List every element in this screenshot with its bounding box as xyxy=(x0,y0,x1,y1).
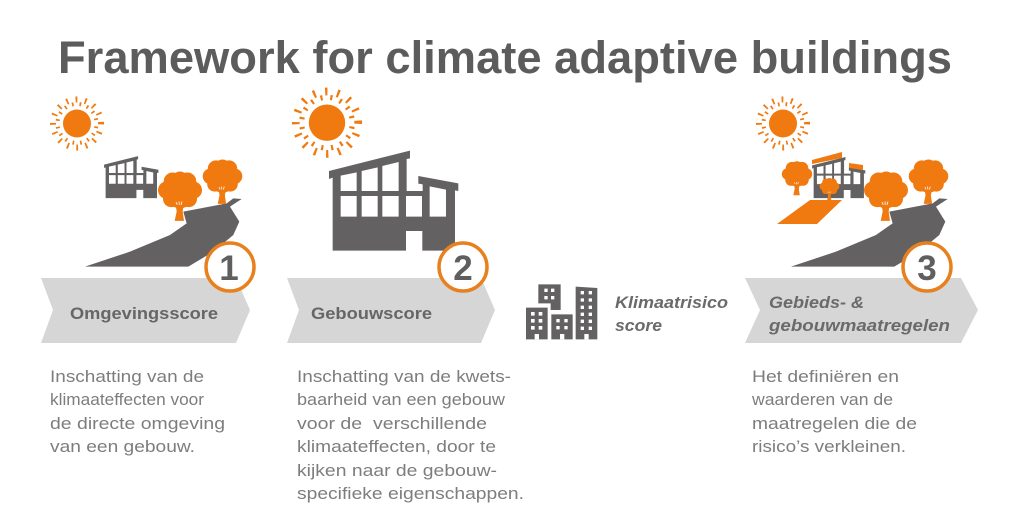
description 3: waarderen van de xyxy=(751,390,893,409)
label: omgevingsscore: Omgevingsscore xyxy=(70,304,218,323)
badge 2: 2 xyxy=(453,249,473,288)
description 1: van een gebouw. xyxy=(50,437,195,456)
badge 2 xyxy=(439,243,487,291)
description 1: de directe omgeving xyxy=(50,414,225,433)
description 1 xyxy=(50,367,225,456)
description 2: klimaateffecten, door te xyxy=(297,437,496,456)
badge 3 xyxy=(903,243,951,291)
description 2: baarheid van een gebouw xyxy=(297,390,506,409)
icon: tree large 1 xyxy=(158,172,202,221)
label: gebieds- en gebouwmaatregelen: gebouwmaatregelen xyxy=(768,316,950,335)
description 3: risico’s verkleinen. xyxy=(752,437,906,456)
description 1: klimaateffecten voor xyxy=(50,390,204,409)
icon: tree left 3 xyxy=(782,161,812,195)
description 3: maatregelen die de xyxy=(752,414,917,433)
badge 1 xyxy=(206,243,254,291)
description 3: Het definiëren en xyxy=(752,367,899,386)
panel: klimaatrisico score xyxy=(526,284,728,339)
description 1: Inschatting van de xyxy=(50,367,204,386)
icon: road 1 xyxy=(85,198,242,267)
icon: large building xyxy=(329,151,458,251)
description 2: kijken naar de gebouw- xyxy=(297,461,497,480)
icon: sun 1 xyxy=(53,100,101,148)
label: klimaatrisico score: score xyxy=(615,316,662,335)
label: klimaatrisico score: Klimaatrisico xyxy=(615,293,728,312)
label: gebouwscore: Gebouwscore xyxy=(311,304,432,323)
description 3 xyxy=(751,367,917,456)
description 2: specifieke eigenschappen. xyxy=(297,484,524,503)
icon: orange path xyxy=(777,200,842,224)
panel: gebieds- en gebouwmaatregelen xyxy=(745,100,978,456)
icon: tree small 1 xyxy=(203,160,242,204)
panel: gebouwscore xyxy=(287,92,524,503)
icon: road 3 xyxy=(791,198,948,267)
panel: omgevingsscore xyxy=(41,100,254,456)
title: Framework for climate adaptive buildings xyxy=(58,32,952,83)
chevron 2 xyxy=(287,278,495,343)
icon: tree small front 3 xyxy=(820,178,839,200)
description 2 xyxy=(297,367,524,503)
chevron 1 xyxy=(41,278,250,343)
icon: orange roofs xyxy=(812,152,863,170)
icon: city buildings xyxy=(526,284,597,339)
icon: small building 1 xyxy=(104,156,158,198)
icon: small building 3 xyxy=(812,157,865,198)
badge 1: 1 xyxy=(219,249,239,288)
icon: tree large 3 xyxy=(864,172,908,221)
icon: sun 3 xyxy=(759,100,807,148)
label: klimaatrisico score xyxy=(615,293,728,335)
description 2: Inschatting van de kwets- xyxy=(297,367,511,386)
icon: tree right 3 xyxy=(909,160,948,204)
label: gebieds- en gebouwmaatregelen xyxy=(768,293,950,335)
chevron 3 xyxy=(745,278,978,343)
label: gebieds- en gebouwmaatregelen: Gebieds- & xyxy=(769,293,864,312)
icon: sun 2 xyxy=(296,92,358,154)
badge 3: 3 xyxy=(917,249,937,288)
description 2: voor de verschillende xyxy=(297,414,487,433)
